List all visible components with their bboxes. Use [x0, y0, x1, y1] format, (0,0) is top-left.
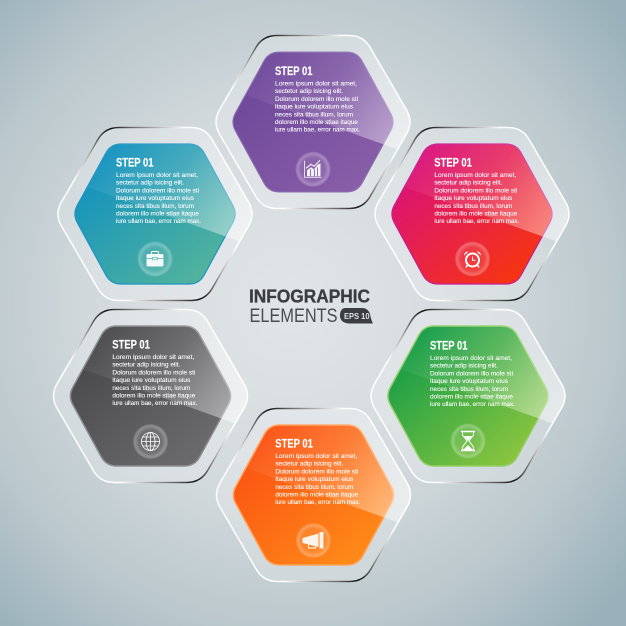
colored hexagon — [75, 144, 235, 284]
step text: Lorem ipsum dolor sit amet, — [430, 355, 512, 362]
step text: neces sita tibus illum, lorum — [275, 484, 353, 491]
glass plate — [58, 128, 252, 300]
badge: EPS 10: EPS 10 — [344, 311, 370, 321]
step text: dolorem illo mole stiae itaque — [112, 392, 196, 400]
step text: dolorem illo mole stiae itaque — [275, 492, 359, 498]
step text: iure ullam bae, error nam max. — [430, 401, 515, 408]
step text: Lorem ipsum dolor sit amet, — [112, 354, 195, 361]
step text: iure ullam bae, error nam max. — [275, 499, 361, 506]
panel: gray hexagon, lower left — [40, 296, 260, 482]
step text: Dolorum dolorem illo mole sti — [116, 187, 199, 194]
step text — [275, 66, 360, 134]
colored hexagon — [70, 326, 231, 466]
step text: dolorem illo mole stiae itaque — [430, 394, 514, 400]
step text: Dolorum dolorem illo mole sti — [275, 468, 358, 475]
glass plate — [54, 310, 248, 482]
step text: itaque iure voluptatum eius — [116, 195, 194, 202]
glass reflection and ring — [45, 114, 265, 300]
step text: iure ullam bae, error nam max. — [434, 218, 520, 225]
colored hexagon — [233, 52, 393, 192]
step text: neces sita tibus illum, lorum — [430, 386, 508, 393]
step text: neces sita tibus illum, lorum — [116, 203, 194, 210]
step text: Lorem ipsum dolor sit amet, — [116, 172, 198, 179]
step text: sectetur adip isicing elit. — [116, 180, 184, 187]
glass reflection and ring — [204, 395, 424, 582]
step text: iure ullam bae, error nam max. — [112, 400, 198, 407]
step text: Lorem ipsum dolor sit amet, — [434, 172, 517, 179]
colored hexagon — [233, 425, 394, 565]
title — [249, 286, 373, 327]
step text: itaque iure voluptatum eius — [112, 377, 190, 384]
glass plate — [216, 408, 410, 582]
step text: STEP 01 — [275, 66, 313, 78]
panel: pink hexagon, upper right — [362, 114, 582, 300]
step text — [434, 158, 520, 225]
icon: chart — [296, 152, 330, 187]
step text — [430, 340, 515, 408]
step text: sectetur adip isicing elit. — [434, 180, 503, 187]
step text: Lorem ipsum dolor sit amet, — [275, 80, 357, 88]
step text — [275, 438, 361, 506]
icon: alarm clock — [455, 242, 490, 276]
step text: itaque iure voluptatum eius — [275, 104, 353, 111]
step text: STEP 01 — [116, 158, 154, 170]
step text: dolorem illo mole stiae itaque — [275, 119, 359, 126]
step text: STEP 01 — [275, 438, 313, 450]
colored hexagon — [388, 326, 548, 466]
step text: Dolorum dolorem illo mole sti — [112, 369, 195, 376]
icon: megaphone — [296, 523, 331, 558]
step text: sectetur adip isicing elit. — [275, 88, 343, 95]
heading: infographic: INFOGRAPHIC — [249, 286, 370, 307]
step text: STEP 01 — [112, 340, 150, 352]
icon: globe — [133, 424, 168, 459]
step text: Lorem ipsum dolor sit amet, — [275, 453, 358, 460]
step text: Dolorum dolorem illo mole sti — [434, 187, 517, 194]
step text: sectetur adip isicing elit. — [112, 362, 181, 369]
step text: sectetur adip isicing elit. — [430, 363, 498, 370]
glass reflection and ring — [358, 296, 578, 482]
panel: blue hexagon, upper left — [45, 114, 265, 300]
panel: purple hexagon, top — [203, 22, 423, 208]
step text — [116, 158, 201, 225]
step text: neces sita tibus illum, lorum — [275, 111, 353, 118]
step text: dolorem illo mole stiae itaque — [116, 210, 200, 218]
icon: briefcase — [138, 242, 172, 276]
glass reflection and ring — [362, 114, 582, 300]
glass reflection and ring — [40, 296, 260, 482]
step text: Dolorum dolorem illo mole sti — [430, 370, 513, 377]
glass reflection and ring — [203, 22, 423, 208]
step text: Dolorum dolorem illo mole sti — [275, 96, 358, 103]
glass plate — [371, 310, 565, 482]
step text: iure ullam bae, error nam max. — [275, 127, 360, 134]
step text: iure ullam bae, error nam max. — [116, 218, 201, 225]
step text: neces sita tibus illum, lorum — [112, 385, 190, 392]
icon: hourglass — [450, 424, 486, 458]
step text: STEP 01 — [430, 340, 468, 352]
step text: itaque iure voluptatum eius — [434, 195, 512, 202]
panel: orange hexagon, bottom — [204, 395, 424, 582]
step text — [112, 340, 198, 407]
step text: sectetur adip isicing elit. — [275, 461, 344, 468]
panel: green hexagon, lower right — [358, 296, 578, 482]
heading: elements: ELEMENTS — [250, 306, 338, 327]
step text: dolorem illo mole stiae itaque — [434, 210, 518, 218]
step text: itaque iure voluptatum eius — [275, 476, 353, 483]
glass plate — [216, 36, 410, 208]
step text: neces sita tibus illum, lorum — [434, 203, 512, 210]
step text: STEP 01 — [434, 158, 472, 170]
glass plate — [375, 128, 569, 300]
colored hexagon — [392, 144, 552, 284]
step text: itaque iure voluptatum eius — [430, 378, 508, 385]
